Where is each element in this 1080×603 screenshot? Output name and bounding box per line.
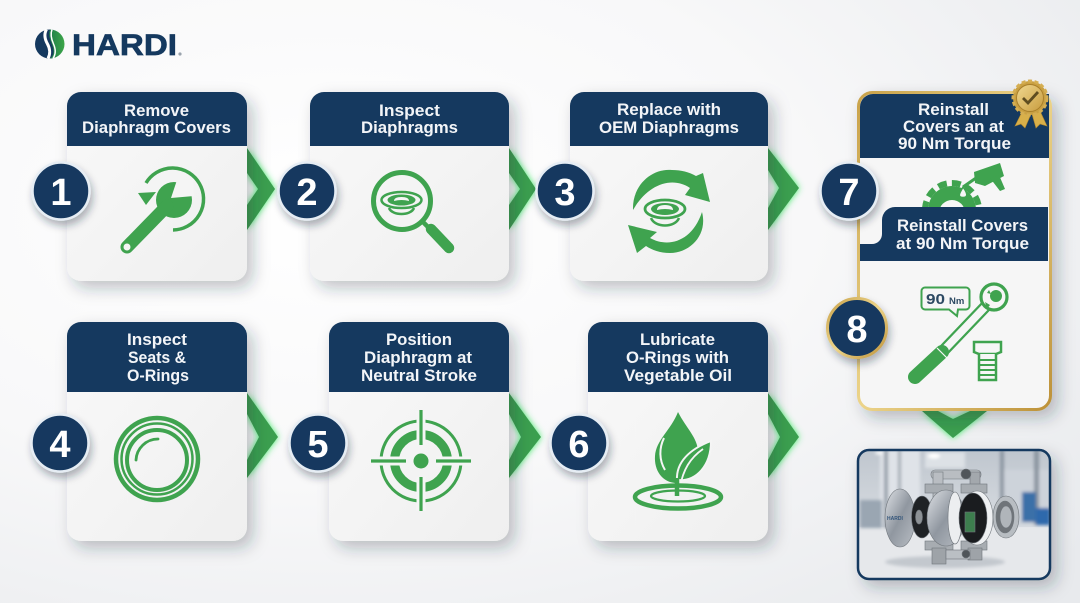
heading: step 4: Seats &	[128, 348, 186, 367]
icon: wrench with arrow	[124, 168, 204, 250]
heading: step 1: Remove	[124, 101, 189, 120]
heading: step 5: Position	[386, 330, 452, 349]
heading: step 4: Inspect	[127, 330, 187, 349]
heading: step 5: Diaphragm at	[364, 348, 472, 367]
heading: step 2	[310, 92, 509, 146]
arrow 4 to 5	[247, 393, 278, 478]
heading: step 5: Neutral Stroke	[361, 366, 477, 385]
icon: oil drop with leaf	[635, 412, 721, 508]
badge: 5: 5	[307, 424, 329, 466]
photo: exploded diaphragm pump: HARDI	[887, 516, 903, 522]
arrow 1 to 2	[247, 148, 275, 230]
arrow 6 to 7	[768, 393, 799, 478]
panel: steps 7 and 8	[858, 92, 1050, 410]
badge: 2	[278, 162, 336, 220]
heading: step 4	[67, 322, 247, 392]
badge: 4	[32, 414, 88, 472]
icon: gear with oil can	[922, 163, 1005, 207]
heading: step 6	[588, 322, 768, 392]
heading: step 8: Reinstall Covers	[897, 216, 1028, 235]
heading: step 8	[860, 207, 1048, 261]
heading: step 6: Lubricate	[640, 330, 715, 349]
badge: 1: 1	[50, 172, 72, 214]
photo: exploded diaphragm pump	[857, 449, 1051, 580]
logo: HARDI: HARDI	[72, 29, 177, 62]
badge: 2: 2	[296, 172, 318, 214]
badge: 8	[828, 298, 886, 358]
icon: magnifier over diaphragm	[374, 172, 449, 248]
heading: step 1	[67, 92, 247, 146]
panel: step 5	[329, 322, 509, 541]
panel: step 2	[310, 92, 509, 281]
heading: step 1: Diaphragm Covers	[82, 118, 231, 137]
heading: step 6: O-Rings with	[626, 348, 729, 367]
icon: torque wrench and bolt	[915, 284, 1007, 380]
heading: step 3: Replace with	[617, 100, 721, 119]
badge: 5	[290, 414, 346, 472]
arrow 5 to 6	[509, 393, 541, 478]
heading: step 8: at 90 Nm Torque	[896, 234, 1029, 253]
logo: HARDI	[35, 29, 182, 62]
icon: gold medal	[1013, 81, 1047, 128]
heading: step 2: Diaphragms	[361, 118, 458, 137]
heading: step 7: Reinstall	[918, 100, 989, 119]
heading: step 5	[329, 322, 509, 392]
arrow 3 to 7	[768, 148, 799, 230]
arrow down to photo	[922, 411, 987, 438]
badge: 7: 7	[838, 172, 860, 214]
badge: 3	[536, 162, 594, 220]
arrow 2 to 3	[509, 148, 536, 230]
heading: step 2: Inspect	[379, 101, 440, 120]
panel: step 6	[588, 322, 768, 541]
badge: 7	[820, 162, 878, 220]
badge: 4: 4	[49, 424, 71, 466]
badge: 1	[32, 162, 90, 220]
icon: O-rings	[116, 418, 198, 500]
heading: step 7	[860, 94, 1049, 158]
icon: torque wrench and bolt: Nm	[949, 296, 964, 307]
heading: step 3	[570, 92, 768, 146]
icon: replace arrows with diaphragm	[628, 170, 710, 253]
heading: step 4: O-Rings	[127, 366, 189, 385]
heading: step 6: Vegetable Oil	[624, 366, 732, 385]
heading: step 3: OEM Diaphragms	[599, 118, 739, 137]
panel: step 4	[67, 322, 247, 541]
panel: step 3	[570, 92, 768, 281]
badge: 6	[550, 414, 608, 472]
icon: target crosshair	[371, 410, 471, 511]
badge: 6: 6	[568, 424, 590, 466]
panel: step 1	[67, 92, 247, 281]
badge: 8: 8	[846, 309, 868, 351]
icon: torque wrench and bolt: 90	[926, 291, 945, 308]
heading: step 7: Covers an at	[903, 117, 1004, 136]
badge: 3: 3	[554, 172, 576, 214]
heading: step 7: 90 Nm Torque	[898, 134, 1011, 153]
